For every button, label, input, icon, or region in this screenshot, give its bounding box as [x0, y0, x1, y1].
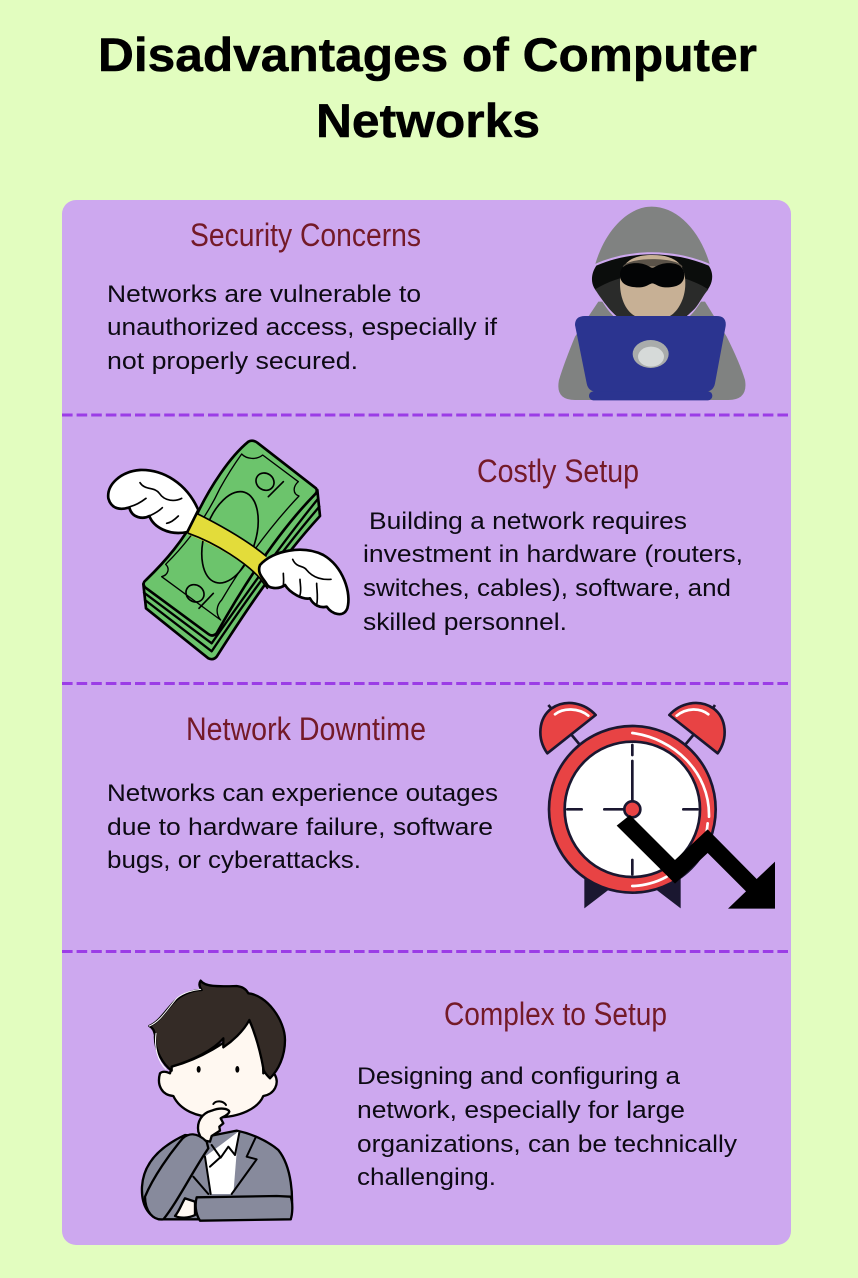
text: network downtime body: [107, 780, 498, 874]
title: Disadvantages of Computer: [98, 28, 757, 81]
text: costly setup body: investment in hardware (routers,: [363, 541, 743, 568]
text: network downtime body: Networks can experience outages: [107, 780, 498, 807]
panel: security concerns: [107, 207, 745, 400]
text: costly setup body: [363, 508, 743, 636]
heading: complex to setup: Complex to Setup: [444, 996, 667, 1032]
panel: complex to setup: [142, 981, 737, 1221]
panel: costly setup: [108, 441, 743, 659]
heading: network downtime: Network Downtime: [186, 711, 426, 747]
text: costly setup body: Building a network requires: [369, 508, 687, 535]
text: complex to setup body: [357, 1063, 737, 1191]
text: security concerns body: Networks are vulnerable to: [107, 281, 421, 308]
text: costly setup body: skilled personnel.: [363, 609, 567, 636]
icon: flying money with wings: [108, 441, 348, 659]
text: security concerns body: [107, 281, 497, 375]
text: network downtime body: bugs, or cyberattacks.: [107, 847, 361, 874]
text: complex to setup body: Designing and configuring a: [357, 1063, 681, 1090]
title: Networks: [316, 94, 540, 147]
text: costly setup body: switches, cables), software, and: [363, 575, 731, 602]
icon: thinking man in suit: [142, 981, 292, 1221]
text: complex to setup body: organizations, can be technically: [357, 1131, 737, 1158]
text: security concerns body: not properly secured.: [107, 348, 358, 375]
heading: costly setup: Costly Setup: [477, 453, 639, 489]
heading: security concerns: Security Concerns: [190, 217, 421, 253]
icon: alarm clock with falling arrow: [540, 703, 775, 909]
text: security concerns body: unauthorized access, especially if: [107, 314, 497, 341]
title: [98, 28, 757, 147]
text: network downtime body: due to hardware failure, software: [107, 814, 493, 841]
icon: hooded hacker at laptop: [558, 207, 745, 400]
text: complex to setup body: network, especially for large: [357, 1097, 685, 1124]
panel: network downtime: [107, 703, 775, 909]
panel: background card: [62, 200, 791, 1245]
text: complex to setup body: challenging.: [357, 1164, 496, 1191]
